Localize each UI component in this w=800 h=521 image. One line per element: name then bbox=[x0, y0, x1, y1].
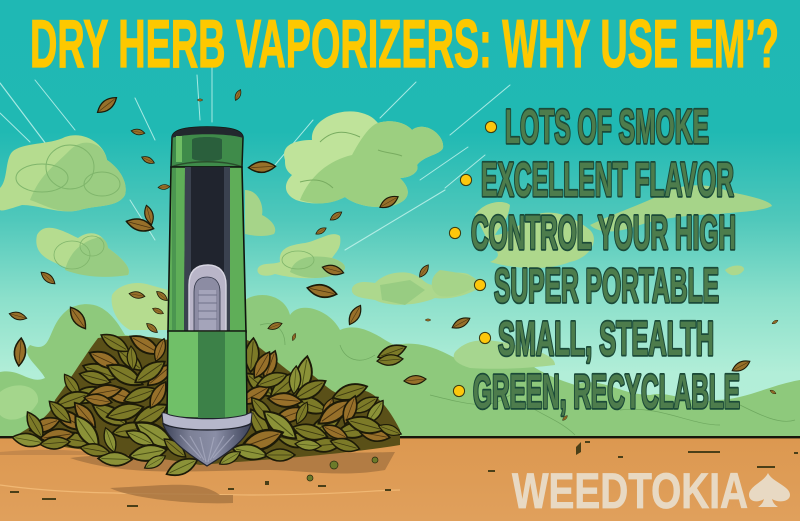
scattered leaves bbox=[8, 89, 779, 421]
cloud: right streak bbox=[590, 185, 772, 231]
benefit list bbox=[449, 101, 740, 419]
vaporizer chamber bbox=[189, 265, 226, 331]
cloud: top centre bbox=[284, 111, 443, 207]
cloud: small centre bbox=[257, 234, 345, 278]
cloud: lower-left bbox=[36, 228, 129, 277]
leaf pile bbox=[11, 329, 403, 480]
vaporizer cone tip bbox=[163, 424, 251, 466]
cloud: small right bbox=[725, 266, 744, 275]
cloud: centre low bbox=[352, 272, 482, 305]
cloud: small behind vaporizer left bbox=[112, 283, 168, 330]
cloud: far-left bbox=[0, 135, 126, 211]
item: small, stealth bbox=[479, 313, 714, 366]
vaporizer body sides bbox=[168, 167, 246, 332]
light rays bbox=[0, 62, 510, 250]
cloud: far right low bbox=[432, 270, 478, 297]
cloud: behind vaporizer right bbox=[245, 190, 275, 236]
vaporizer bbox=[162, 127, 252, 466]
vaporizer top cap bbox=[171, 127, 243, 167]
vaporizer lower body bbox=[167, 331, 247, 418]
ground bbox=[0, 436, 800, 521]
cloud: behind list middle bbox=[475, 202, 594, 268]
green hills bbox=[0, 295, 800, 437]
vaporizer dark window bbox=[184, 167, 230, 331]
item: super portable bbox=[474, 260, 719, 313]
item: lots of smoke bbox=[485, 101, 709, 154]
vaporizer metal ring bbox=[162, 413, 252, 430]
icon: spade bbox=[749, 473, 790, 507]
